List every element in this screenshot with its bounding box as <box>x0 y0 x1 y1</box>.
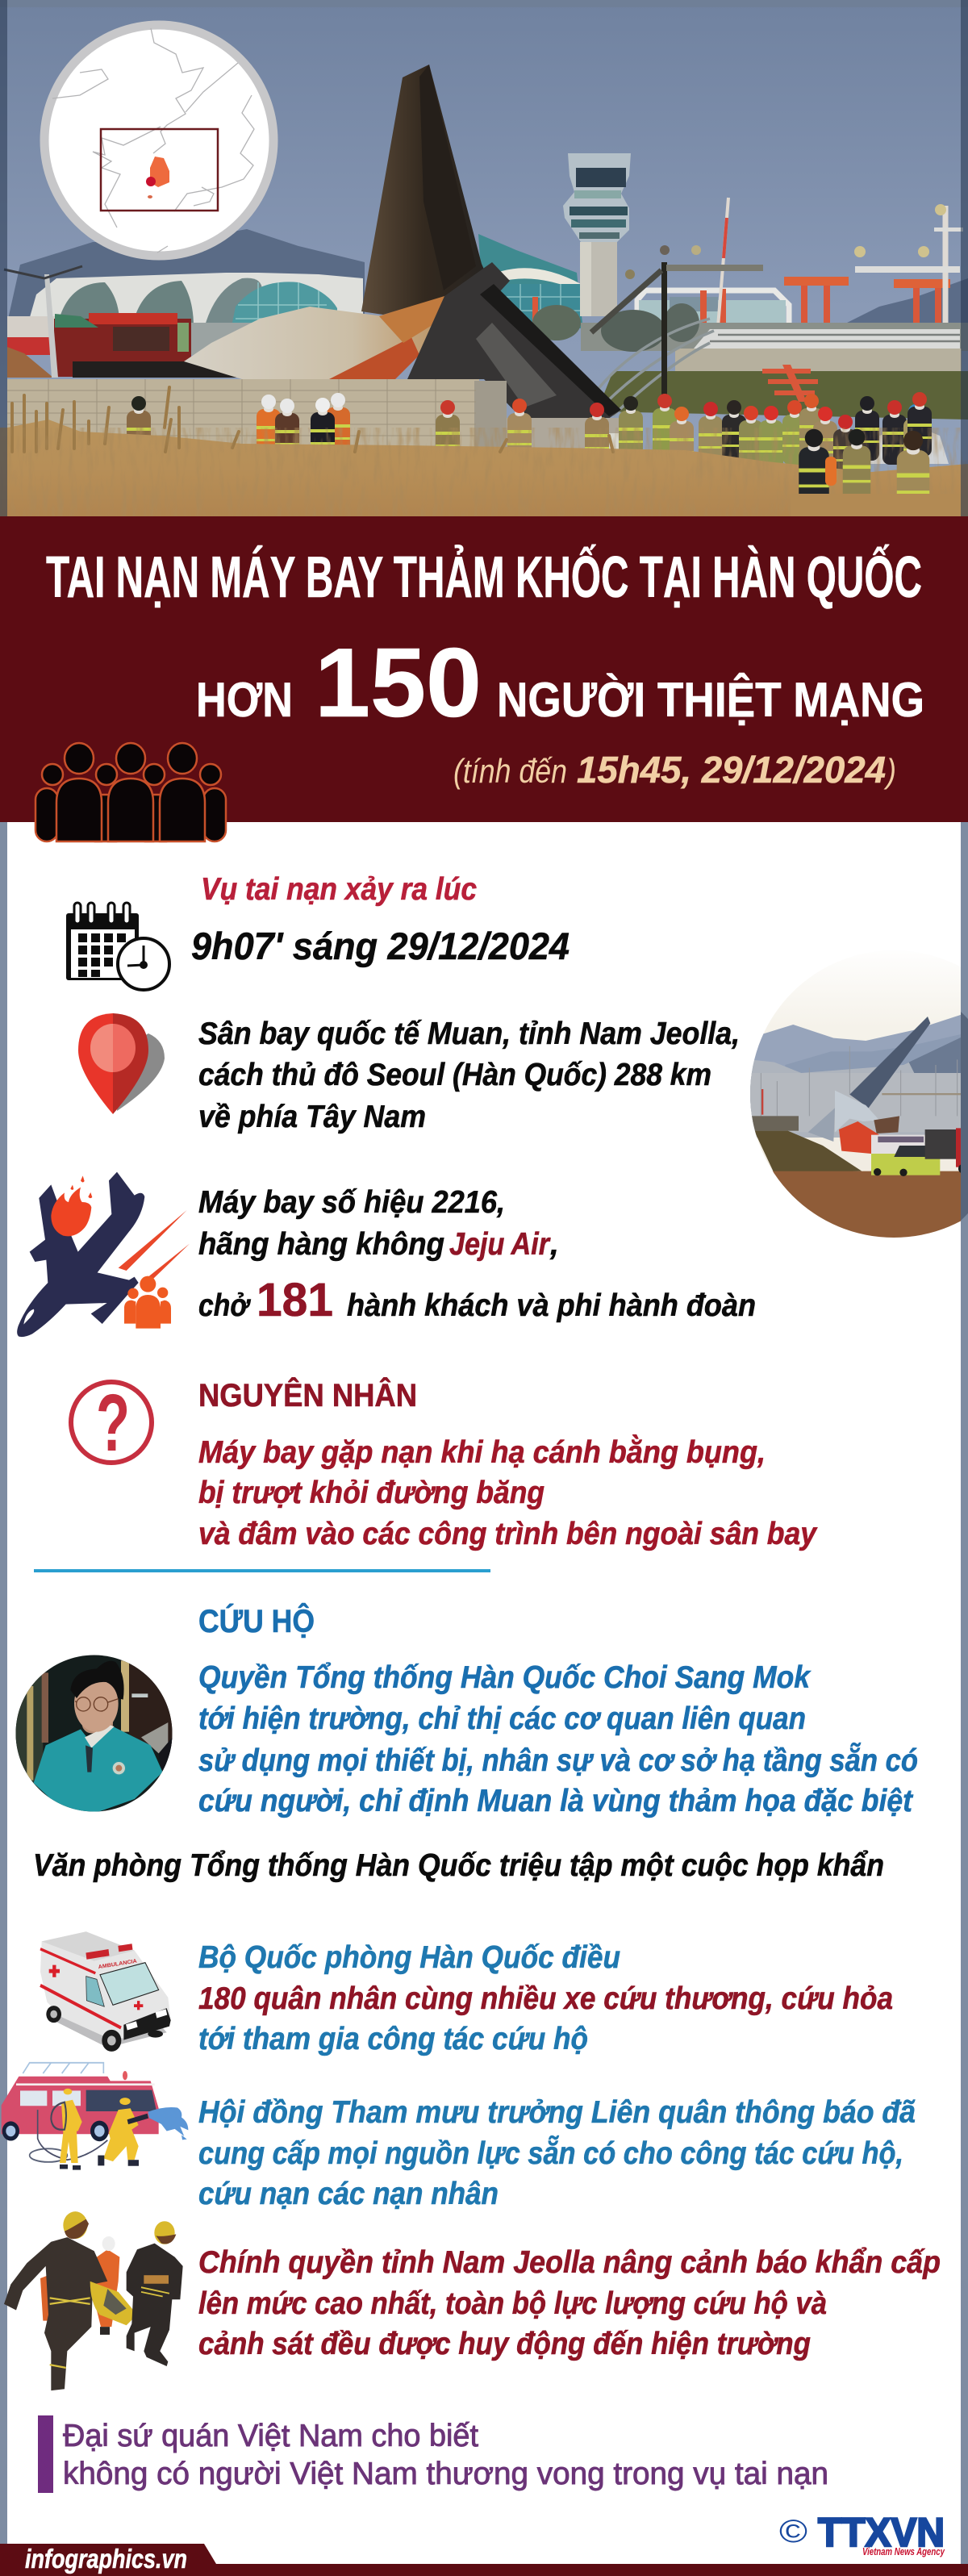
plane details text: , <box>549 1227 559 1262</box>
rescue text: defence ministry: tới tham gia công tác cứu hộ <box>198 2022 588 2056</box>
plane details text: hãng hàng không <box>198 1227 444 1262</box>
white lamp post <box>44 274 58 378</box>
footer bar: infographics.vn <box>25 2544 187 2574</box>
location text: cách thủ đô Seoul (Hàn Quốc) 288 km <box>198 1058 711 1092</box>
embassy note: Đại sứ quán Việt Nam cho biết <box>63 2419 478 2453</box>
rescue text: Jeolla province: lên mức cao nhất, toàn bộ lực lượng cứu hộ và <box>198 2286 827 2321</box>
main content panel <box>7 822 961 2573</box>
heading: time of accident: Vụ tai nạn xảy ra lúc <box>201 872 477 907</box>
rescue text: defence ministry <box>198 1940 893 2056</box>
passengers <box>124 1276 171 1329</box>
grass foreground <box>0 420 968 516</box>
rescue text: Jeolla province: cảnh sát đều được huy động đến hiện trường <box>198 2327 811 2361</box>
date and time: 9h07' sáng 29/12/2024 <box>191 925 570 967</box>
map frame <box>101 129 218 211</box>
rescue workers behind grass <box>127 392 932 470</box>
flame <box>51 1175 92 1236</box>
photo margins <box>0 0 968 7</box>
icon: location pin <box>78 1013 165 1114</box>
fallen orange sign <box>762 365 818 402</box>
plane details text: hành khách và phi hành đoàn <box>347 1288 756 1323</box>
icon: ambulance <box>40 1931 171 2052</box>
fire truck <box>7 316 55 337</box>
orange signs <box>784 277 849 286</box>
location text <box>198 1017 740 1134</box>
icon: question mark: ? <box>96 1378 130 1468</box>
icon: calendar and clock <box>66 903 169 990</box>
emergency meeting text: Văn phòng Tổng thống Hàn Quốc triệu tập một cuộc họp khẩn <box>33 1848 884 1883</box>
icon: fire truck and firefighters <box>2 2063 188 2170</box>
aircraft fuselage <box>184 307 431 379</box>
left terminal <box>30 273 363 323</box>
logo: TTXVN: © <box>779 2514 807 2549</box>
plane details text: Máy bay số hiệu 2216, <box>198 1185 505 1220</box>
embassy note <box>38 2415 828 2493</box>
left rescuer <box>4 2237 107 2390</box>
debris in the crowd <box>870 432 949 464</box>
plane <box>17 1172 144 1337</box>
burned rear fuselage <box>407 262 621 421</box>
photo: Choi Sang Mok <box>14 1654 175 1815</box>
icon: burning plane <box>17 1172 190 1337</box>
headline: death toll: HƠN <box>196 673 293 727</box>
impact streaks <box>119 1210 187 1271</box>
plane details text: Jeju Air <box>449 1227 551 1262</box>
rescue text: defence ministry: Bộ Quốc phòng Hàn Quốc điều <box>198 1940 620 1975</box>
rescue text: joint chiefs <box>198 2095 916 2211</box>
time stamp: ) <box>883 752 896 790</box>
kneeling firefighter <box>103 2098 139 2161</box>
headline: death toll: 150 <box>315 628 482 737</box>
rescue text: acting president: Quyền Tổng thống Hàn Quốc Choi Sang Mok <box>198 1660 812 1695</box>
right rescuer <box>127 2244 183 2366</box>
title panel <box>0 516 968 822</box>
location text: về phía Tây Nam <box>198 1100 426 1134</box>
trees and platform <box>581 323 968 351</box>
logo: TTXVN: TTXVN <box>818 2510 945 2555</box>
control tower <box>591 242 617 316</box>
crash site marker <box>146 177 156 186</box>
rescue text: acting president <box>198 1660 918 1818</box>
headline: death toll: NGƯỜI THIỆT MẠNG <box>497 673 924 727</box>
location text: Sân bay quốc tế Muan, tỉnh Nam Jeolla, <box>198 1017 740 1051</box>
cause text <box>198 1434 818 1551</box>
icon: ambulance: AMBULANCIA <box>98 1958 138 1970</box>
photo overlap on margin <box>961 1012 968 1221</box>
time stamp: (tính đến <box>453 752 567 790</box>
plane details text: chở <box>198 1288 251 1323</box>
standing firefighter <box>60 2089 82 2163</box>
icon: rescuers carrying a stretcher <box>4 2211 183 2390</box>
masts <box>716 198 728 347</box>
plane details text <box>198 1185 756 1326</box>
hero photo: crash site <box>0 0 968 518</box>
right terminal <box>478 234 582 323</box>
time stamp: 15h45, 29/12/2024 <box>577 749 886 791</box>
middle rescuer <box>94 2249 119 2327</box>
cause text: Máy bay gặp nạn khi hạ cánh bằng bụng, <box>198 1434 766 1470</box>
cause text: bị trượt khỏi đường băng <box>198 1476 544 1510</box>
plane details text: 181 <box>257 1274 333 1326</box>
rescue text: acting president: tới hiện trường, chỉ thị các cơ quan liên quan <box>198 1701 806 1736</box>
water jet <box>148 2107 188 2140</box>
embassy note: không có người Việt Nam thương vong trong vụ tai nạn <box>63 2457 828 2491</box>
icon: crowd of people <box>35 743 226 841</box>
headline: death toll <box>196 628 924 737</box>
rescue text: joint chiefs: Hội đồng Tham mưu trưởng Liên quân thông báo đã <box>198 2095 916 2130</box>
stretcher <box>90 2282 137 2325</box>
footer bar <box>0 2544 968 2576</box>
locator map <box>44 25 273 256</box>
rescue text: defence ministry: 180 quân nhân cùng nhiều xe cứu thương, cứu hỏa <box>198 1981 893 2016</box>
photo: plane wreck on airfield <box>750 976 961 1238</box>
rescue text: acting president: cứu người, chỉ định Muan là vùng thảm họa đặc biệt <box>198 1784 914 1818</box>
rescue text: joint chiefs: cứu nạn các nạn nhân <box>198 2177 499 2211</box>
rescue workers in front <box>799 429 929 494</box>
heading: cause: NGUYÊN NHÂN <box>198 1376 417 1413</box>
heading: rescue: CỨU HỘ <box>198 1602 315 1639</box>
concrete block wall <box>7 379 479 448</box>
aircraft tail fin <box>361 65 488 315</box>
South Korea highlight <box>150 157 169 187</box>
right building <box>637 290 789 326</box>
light pole <box>661 262 667 403</box>
rescue text: Jeolla province <box>198 2245 941 2361</box>
icon: question mark <box>71 1378 152 1468</box>
cause text: và đâm vào các công trình bên ngoài sân bay <box>198 1517 818 1551</box>
